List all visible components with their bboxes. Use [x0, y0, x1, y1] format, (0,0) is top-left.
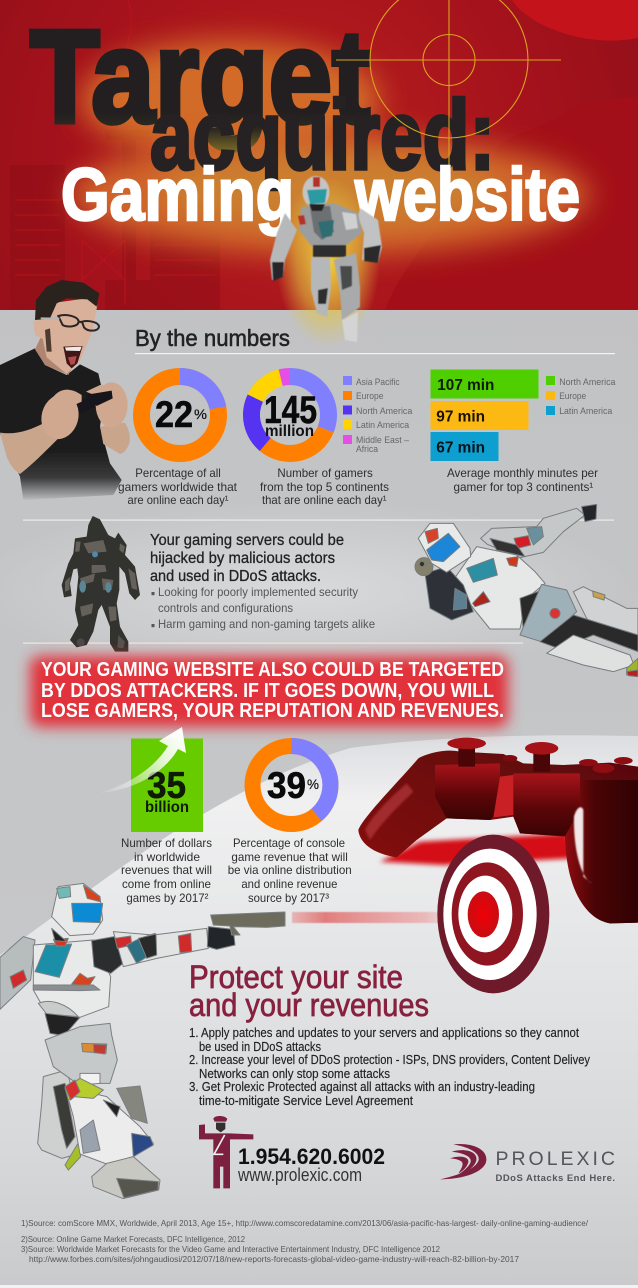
- gun: [211, 912, 285, 935]
- caption: average minutes: Average monthly minutes per: [447, 466, 598, 480]
- text block: servers could be hijacked: Looking for poorly implemented security: [158, 585, 358, 599]
- text block: servers could be hijacked: [150, 532, 375, 631]
- helmet: [52, 928, 67, 942]
- left forearm: [0, 423, 58, 474]
- caption: percentage online: gamers worldwide that: [118, 480, 238, 494]
- caption: average minutes: gamer for top 3 continents¹: [454, 480, 593, 494]
- alert banner: BY DDOS ATTACKERS. IF IT GOES DOWN, YOU WILL: [41, 680, 494, 702]
- protection steps list: 3. Get Prolexic Protected against all attacks with an industry-leading: [189, 1080, 535, 1094]
- alert banner: YOUR GAMING WEBSITE ALSO COULD BE TARGETED: [41, 659, 504, 681]
- foot: [92, 1157, 160, 1199]
- protection steps list: 1. Apply patches and updates to your servers and applications so they cannot: [189, 1026, 579, 1040]
- donut chart: 39 percent: 39: [267, 765, 306, 806]
- mouth: [63, 346, 83, 368]
- phone number: 1.954.620.6002: [238, 1144, 385, 1169]
- left leg: [311, 257, 331, 317]
- protection steps list: [189, 1026, 591, 1108]
- protection steps list: 2. Increase your level of DDoS protection - ISPs, DNS providers, Content Delivey: [189, 1053, 591, 1067]
- shirt: [0, 348, 122, 500]
- legend: top 3 continents: Latin America: [559, 406, 613, 417]
- legend: continents: [343, 376, 413, 455]
- caption: console revenue: Percentage of console: [233, 836, 345, 850]
- heading: Protect your site: [189, 959, 429, 1023]
- text block: servers could be hijacked: controls and configurations: [158, 601, 293, 615]
- lower leg: [547, 635, 634, 672]
- helmet: [418, 523, 471, 572]
- hips: [45, 1023, 117, 1083]
- buttons: [579, 759, 598, 766]
- bar chart: monthly minutes: 107 min: [437, 377, 494, 394]
- legend: top 3 continents: [546, 376, 616, 417]
- divider lines: [23, 520, 614, 644]
- title: acquired: acquired:: [150, 80, 495, 190]
- caption: console revenue: and online revenue: [241, 877, 338, 891]
- green stat box: 35 billion: billion: [145, 799, 189, 816]
- figure: flying soldier with gun: [415, 504, 638, 677]
- donut chart: 145 million: 145: [264, 389, 317, 432]
- title: Target: Target: [30, 3, 370, 150]
- left arm: [270, 213, 297, 280]
- orange glow behind title: [70, 40, 590, 347]
- bar chart: monthly minutes: [430, 370, 538, 461]
- caption: percentage online: [118, 466, 238, 507]
- caption: average minutes: [447, 466, 598, 494]
- caption: percentage online: are online each day¹: [128, 493, 228, 507]
- controller: [61, 391, 113, 414]
- protection steps list: time-to-mitigate Service Level Agreement: [199, 1094, 413, 1108]
- hips: [520, 584, 577, 642]
- torso: [453, 547, 545, 629]
- text block: servers could be hijacked: Harm gaming and non-gaming targets alike: [158, 617, 375, 631]
- midsection: [520, 588, 547, 630]
- donut chart: 39 percent: %: [307, 776, 319, 792]
- donut chart: 22 percent: %: [194, 406, 207, 422]
- caption: percentage online: Percentage of all: [135, 466, 221, 480]
- figure: dark alien warrior: [62, 516, 140, 652]
- pelvis: [313, 245, 346, 257]
- caption: number of gamers: from the top 5 continents: [260, 480, 389, 494]
- waist: [45, 1013, 80, 1036]
- caption: number of dollars: revenues that will: [121, 863, 212, 877]
- alert banner: LOSE GAMERS, YOUR REPUTATION AND REVENUES.: [41, 700, 504, 722]
- text block: servers could be hijacked: and used in DDoS attacks.: [150, 568, 321, 585]
- heading: Protect your site: Protect your site: [189, 959, 403, 995]
- footnotes: 3)Source: Worldwide Market Forecasts for the Video Game and Interactive Entertainment Industry, DFC Intelligence 2012: [21, 1244, 440, 1254]
- arm to gun: [92, 937, 127, 973]
- arm raised: [481, 508, 585, 558]
- footnotes: 2)Source: Online Game Market Forecasts, DFC Intelligence, 2012: [21, 1234, 245, 1244]
- section heading: By the numbers: By the numbers: [135, 325, 290, 351]
- text block: servers could be hijacked: hijacked by malicious actors: [150, 550, 335, 567]
- logo: Prolexic: [440, 1144, 615, 1184]
- title: Gaming website: website: [354, 153, 580, 236]
- aim streak: [292, 912, 457, 923]
- glasses: [58, 315, 99, 331]
- caption: console revenue: [228, 836, 352, 905]
- caption: number of gamers: [260, 466, 389, 507]
- thigh: [573, 587, 638, 635]
- donut chart: 145 million: [243, 368, 337, 462]
- back leg: [38, 1070, 80, 1158]
- forearm with gun: [425, 567, 473, 620]
- green stat box: 35 billion: [131, 738, 203, 832]
- caption: number of gamers: Number of gamers: [277, 466, 373, 480]
- controller body: [358, 751, 638, 923]
- protection steps list: be used in DDoS attacks: [199, 1040, 321, 1054]
- right foot: [342, 312, 358, 342]
- bullseye target: [437, 835, 549, 993]
- donut chart: 22 percent: [142, 368, 226, 454]
- protection steps list: Networks can only stop some attacks: [199, 1067, 390, 1081]
- caption: number of dollars: come from online: [122, 877, 211, 891]
- caption: number of dollars: [121, 836, 212, 905]
- legend: continents: Africa: [356, 444, 379, 455]
- dark leg: [540, 615, 638, 652]
- caption: console revenue: source by 2017³: [248, 891, 329, 905]
- footnotes: http://www.forbes.com/sites/johngaudiosi/2012/07/18/new-reports-forecasts-global-video-game-industry-will-reach-82-billion-by-2017: [29, 1254, 519, 1264]
- knee armour back: [117, 1086, 147, 1123]
- red header background: [0, 0, 638, 310]
- right arm: [358, 208, 382, 263]
- figure: excited gamer with controller: [0, 280, 130, 500]
- legend: top 3 continents: North America: [559, 377, 616, 388]
- helmet: [302, 176, 330, 208]
- caption: console revenue: be via online distribution: [228, 863, 352, 877]
- footnotes: 1)Source: comScore MMX, Worldwide, April 2013, Age 15+, http://www.comscoredatamine.com/2013/06/asia-pacific-has-largest- daily-online-gaming-audience/: [21, 1218, 589, 1228]
- legend: continents: Middle East –: [356, 435, 410, 446]
- caption: number of gamers: that are online each day¹: [262, 493, 386, 507]
- title: Gaming website: Gaming: [61, 153, 294, 236]
- figure: soldier aiming pistol: [0, 883, 285, 1199]
- hands: [36, 390, 84, 443]
- hand: [207, 927, 235, 949]
- cliff silhouette: [385, 97, 638, 310]
- icon: traffic officer: [199, 1116, 253, 1188]
- legend: continents: Latin America: [356, 420, 410, 431]
- caption: number of dollars: in worldwide: [134, 850, 200, 864]
- bar chart: monthly minutes: 67 min: [436, 439, 485, 456]
- logo: Prolexic: PROLEXIC: [496, 1148, 615, 1170]
- green stat box: 35 billion: 35: [147, 765, 186, 806]
- neck: [35, 328, 80, 375]
- beard: [45, 328, 52, 352]
- legend: continents: Europe: [356, 391, 384, 402]
- legend: continents: Asia Pacific: [356, 377, 400, 388]
- torso: [33, 940, 111, 1017]
- legend: continents: North America: [356, 406, 413, 417]
- website: www.prolexic.com: [237, 1165, 362, 1185]
- bar chart: monthly minutes: 97 min: [436, 408, 485, 425]
- donut chart: 22 percent: 22: [155, 394, 193, 435]
- caption: console revenue: game revenue that will: [231, 850, 348, 864]
- red game controller: [358, 738, 638, 923]
- moon: [512, 0, 638, 41]
- hair: [35, 280, 99, 320]
- title: Gaming website: [61, 153, 580, 236]
- figure: soldier jumping in header: [270, 176, 382, 342]
- caption: number of dollars: games by 2017²: [126, 891, 208, 905]
- left arm: [0, 937, 35, 1009]
- city skyline: [10, 130, 220, 310]
- donut chart: 39 percent: [252, 738, 338, 824]
- heading: Protect your site: and your revenues: [189, 987, 429, 1023]
- legend: top 3 continents: Europe: [559, 391, 586, 402]
- donut chart: 145 million: million: [265, 423, 314, 440]
- front leg: [65, 1087, 153, 1164]
- growth arrow: [100, 727, 186, 793]
- text block: servers could be hijacked: Your gaming servers could be: [150, 532, 344, 549]
- torso: [299, 203, 362, 248]
- alert banner: [30, 656, 508, 727]
- right forearm: [100, 423, 130, 454]
- face: [33, 298, 97, 374]
- logo: Prolexic: DDoS Attacks End Here.: [496, 1173, 615, 1184]
- joysticks: [458, 745, 475, 767]
- controller shadow: [380, 833, 573, 865]
- footnotes: [21, 1218, 589, 1264]
- right leg: [334, 253, 360, 320]
- crosshair target sight: [336, 0, 561, 172]
- caption: number of dollars: Number of dollars: [121, 836, 212, 850]
